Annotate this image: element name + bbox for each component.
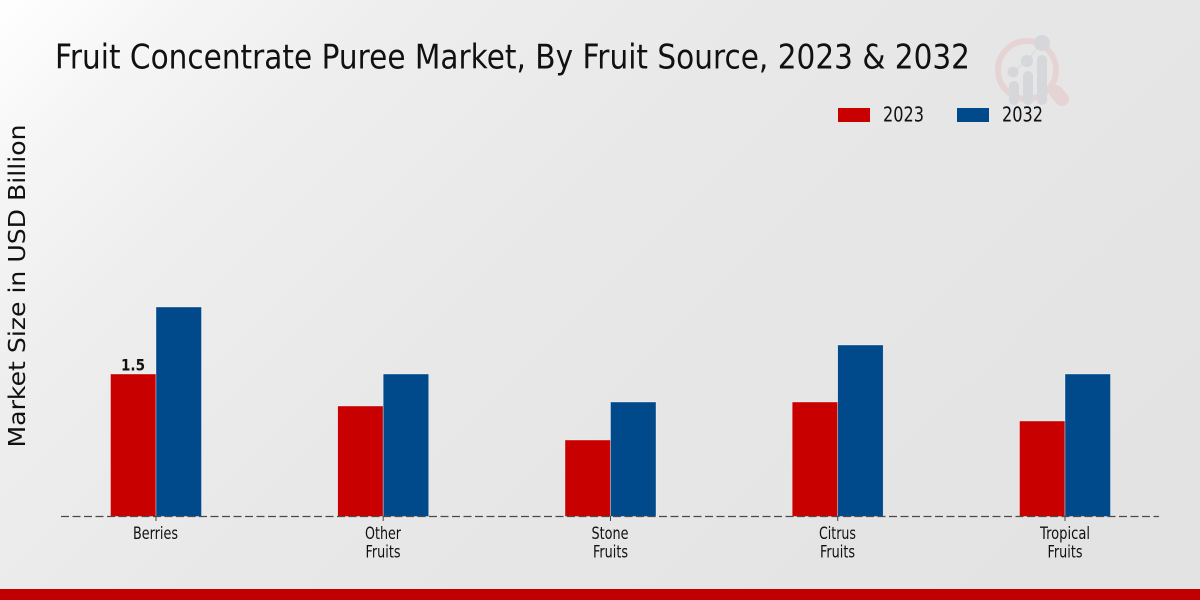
- group: Tropical Fruits: [1020, 374, 1110, 562]
- group: Other Fruits: Other: [365, 524, 401, 543]
- footer bar: [0, 589, 1200, 600]
- legend item: 2032: 2032: [1002, 102, 1043, 126]
- group: Berries: Berries: [133, 524, 178, 543]
- title: Fruit Concentrate Puree Market, By Fruit Source, 2023 & 2032: [55, 38, 970, 78]
- group: Berries: [110, 307, 202, 543]
- legend item: 2023: [838, 102, 924, 126]
- group: Citrus Fruits: [792, 345, 883, 562]
- logo watermark: [998, 35, 1062, 105]
- group: Citrus Fruits: Citrus: [819, 524, 856, 543]
- group: Citrus Fruits: Fruits: [820, 542, 855, 562]
- group: Other Fruits: [338, 374, 429, 562]
- group: Stone Fruits: Fruits: [593, 542, 628, 562]
- y-axis title: Market Size in USD Billion: [5, 124, 31, 448]
- legend item: 2032: [957, 102, 1043, 126]
- group: Tropical Fruits: Tropical: [1039, 524, 1090, 543]
- legend: [838, 102, 1043, 126]
- legend item: 2023: 2023: [883, 102, 924, 126]
- group: Berries: 1.5: [121, 356, 145, 374]
- group: Stone Fruits: Stone: [592, 524, 628, 543]
- group: Other Fruits: Fruits: [366, 542, 400, 562]
- x-axis baseline: [61, 516, 1159, 518]
- group: Tropical Fruits: Fruits: [1048, 542, 1082, 562]
- bar chart: [61, 307, 1159, 562]
- group: Stone Fruits: [565, 402, 656, 562]
